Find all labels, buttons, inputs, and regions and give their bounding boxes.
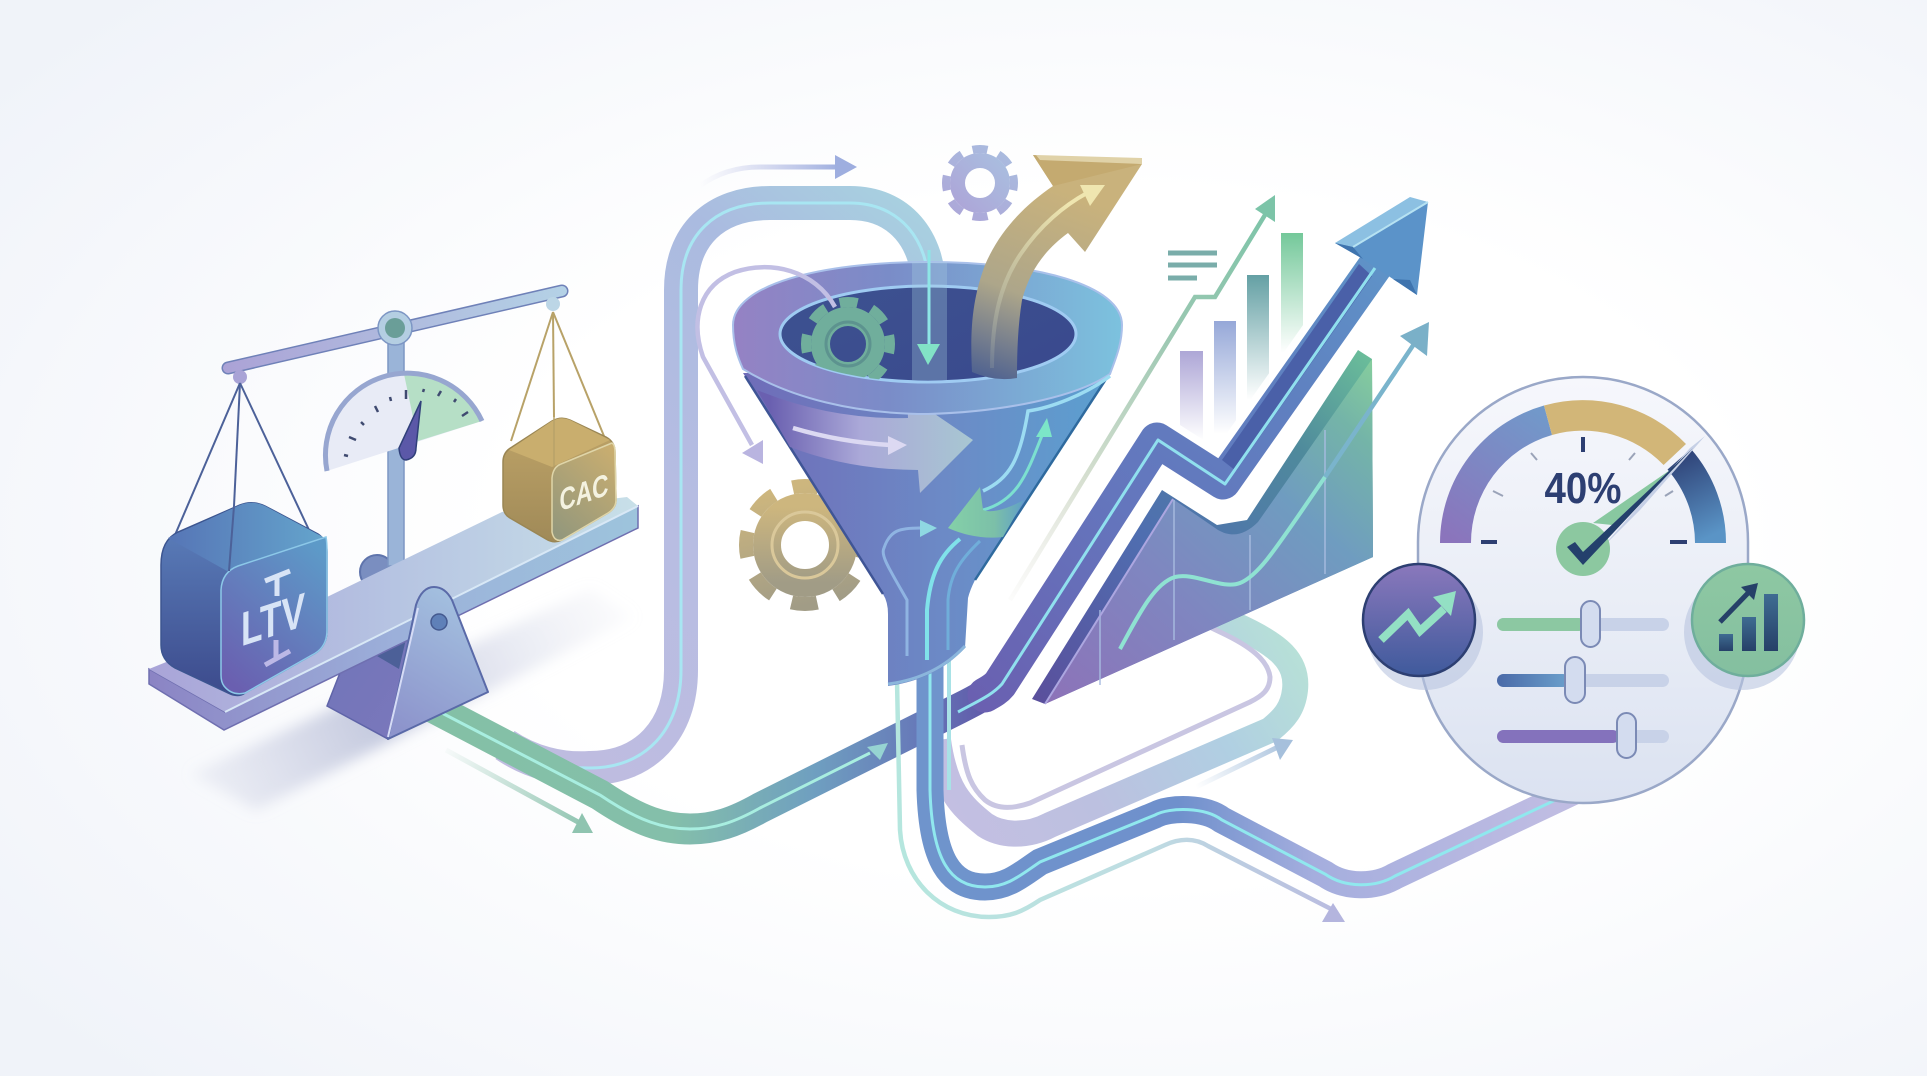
- gold gear behind funnel: [735, 475, 875, 615]
- slider 2: [1497, 657, 1669, 703]
- arrow: small light blue arrow by loop: [1196, 738, 1293, 787]
- fulcrum right face: [388, 587, 488, 739]
- balance scale: [149, 291, 638, 739]
- cyan spout lines: [927, 539, 980, 660]
- funnel body arrow: [757, 390, 973, 493]
- gauge value: 40%: [1544, 464, 1622, 513]
- icon button: bar chart growth: [1684, 564, 1804, 690]
- white halo behind growth arrow: [1040, 262, 1378, 622]
- green curved arrow: [948, 487, 1024, 538]
- cyan outline on funnel: [983, 376, 1110, 491]
- flow path: lower lavender to teal loop: [938, 608, 1295, 834]
- arrow: top thin arrow: [700, 155, 857, 186]
- arrow: thin green upward arrow: [1010, 195, 1275, 600]
- strings right: [511, 312, 606, 441]
- arrow: gold arrow exiting funnel: [971, 155, 1142, 379]
- knob behind plank: [360, 555, 394, 589]
- CAC weight: [503, 417, 616, 542]
- LTV weight: [161, 503, 327, 696]
- balance shadow on ground: [191, 589, 634, 810]
- scale post: [388, 330, 404, 566]
- arrow: thin arc over funnel rim to gold gear: [698, 267, 835, 464]
- gauge arc: navy segment: [1668, 449, 1726, 543]
- flow path: green stream from balance to growth arrow: [415, 684, 1000, 829]
- funnel body: [743, 373, 1110, 686]
- funnel rim: [733, 262, 1122, 414]
- gauge needle with check: [1556, 436, 1705, 576]
- arrow: cyan trend line over area chart: [1120, 322, 1429, 649]
- top beam: [228, 291, 562, 384]
- flow path: main blue stream to dashboard: [930, 640, 1585, 887]
- LTV label: [241, 571, 305, 665]
- funnel edge shading: [745, 376, 1108, 684]
- area chart: [1032, 350, 1373, 704]
- CAC label: CAC: [560, 466, 608, 518]
- large growth arrow: [958, 197, 1428, 712]
- cyan arrow on funnel: [983, 418, 1052, 510]
- funnel: [733, 250, 1122, 686]
- LTV label: LTV: [241, 583, 305, 657]
- pipe entering funnel: [912, 250, 947, 380]
- small inner arrow: [793, 428, 907, 455]
- flow path: thin outer teal arrow: [897, 680, 1345, 922]
- small arrow in spout: [883, 520, 937, 656]
- gauge arc: gold segment: [1544, 400, 1686, 465]
- gauge arc: blue purple segment: [1440, 406, 1552, 543]
- arrow: thin green arrow under stream: [446, 750, 593, 833]
- fulcrum left face: [327, 600, 425, 739]
- icon button: trend up: [1363, 564, 1483, 690]
- dashboard body: [1418, 377, 1748, 803]
- dashboard panel: [1363, 377, 1804, 803]
- strings left: [175, 383, 309, 535]
- arrow: head on green stream: [867, 743, 888, 760]
- flow path: large lavender pipe into funnel: [505, 203, 929, 768]
- gauge ticks: [1481, 437, 1687, 542]
- legend lines icon: [1168, 253, 1217, 278]
- lavender gear: [939, 142, 1021, 224]
- green gear inside funnel: [801, 297, 895, 380]
- plank: [149, 497, 638, 730]
- slider 1: [1497, 601, 1669, 647]
- funnel inner opening: [780, 286, 1076, 382]
- gauge on scale: [325, 373, 482, 471]
- growth bars: [1180, 233, 1303, 441]
- pivot: [378, 311, 412, 345]
- slider 3: [1497, 713, 1669, 758]
